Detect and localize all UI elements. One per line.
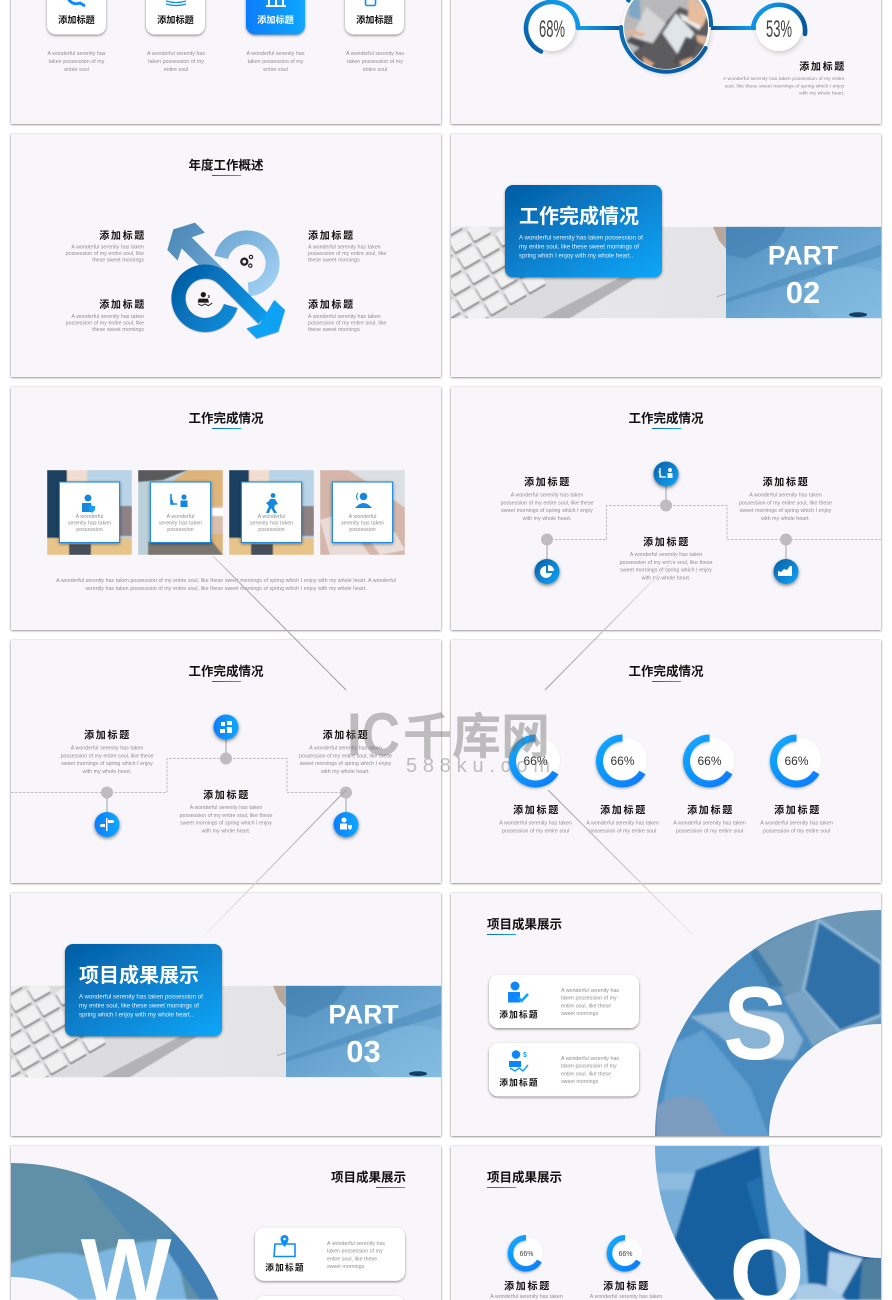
text: card descriptions: A wonderful serenity has [47,51,106,57]
card: section title: A wonderful serenity has taken possession of [79,993,203,1000]
text block: lower left [66,298,146,333]
card: section title: spring which I enjoy with my whole heart.. [519,253,633,260]
text block: right: A wonderful serenity has taken [749,492,822,498]
donut 4: 66% [784,754,809,768]
donut labels: possession of my entire soul [676,828,743,834]
result card 1: entire soul, like these [561,1004,611,1010]
donut labels: 添加标题 [603,1280,650,1292]
donut 4 [773,737,822,784]
text block: right note: 添加标题 [799,60,846,73]
donut labels: A wonderful serenity has taken [590,1294,662,1300]
banner photo: blue tinted [286,986,442,1078]
card: phone [345,0,404,34]
text block: right note [723,60,846,96]
content box: serenity has taken [68,520,111,526]
result card 2: sweet mornings [561,1079,599,1085]
panel: icon cards (top left, cropped) [11,0,441,124]
result card 1: taken possession of my [561,996,617,1002]
text block: lower left: these sweet mornings [92,327,144,333]
panel: results S [451,893,890,1140]
watermark: 588ku logo: 千库网 [403,710,550,764]
text block: lower left: A wonderful serenity has taken [71,314,144,320]
card: section title: 工作完成情况 [519,204,639,228]
panel: section divider part 03 [0,893,462,1136]
watermark: diagonal lines [205,555,693,935]
text block: left: 添加标题 [524,476,571,488]
card: search [47,0,106,34]
text block: middle: with my whole heart. [202,828,250,834]
text block: middle: sweet mornings of spring which I enjoy [620,568,712,574]
banner photo: blue tinted [726,226,882,318]
donut 1: 66% [523,754,548,768]
card: section title: my entire soul, like these sweet mornings of [79,1003,199,1010]
card: section title: spring which I enjoy with my whole heart.. [79,1012,193,1019]
text block: left: with my whole heart. [83,769,131,775]
heading: 工作完成情况 [628,664,704,678]
connector lines [577,26,757,30]
text block: left: A wonderful serenity has taken [71,746,143,752]
donut right [609,1237,642,1269]
text block: middle: with my whole heart. [642,576,690,582]
node: right [334,786,358,837]
card: section title: my entire soul, like these sweet mornings of [519,244,639,251]
text block: lower right [308,298,386,333]
panel: timeline bright [11,640,441,883]
panel: timeline blue dark [451,387,881,630]
donut labels: A wonderful serenity has taken [673,820,746,826]
panel: section divider part 02 [450,133,882,380]
text: card descriptions: taken possession of my [148,59,204,65]
result card 1: entire soul, like these [327,1256,377,1262]
text block: right: A wonderful serenity has taken [309,746,382,752]
text block: upper right: A wonderful serenity has taken [308,245,381,251]
text block: middle [180,788,272,834]
result card 2 [489,1043,639,1096]
gauge: 53% [753,5,805,51]
banner photo: keyboard [11,986,286,1078]
text block: left [501,476,593,522]
text block: upper right: possession of my entire soul, like [308,251,386,257]
text: part number: PART [768,240,838,270]
result card 1 [489,975,639,1028]
text: card descriptions: entire soul [363,67,387,73]
content box: possession [167,527,194,533]
donut left: 66% [519,1251,534,1258]
result card 1: A wonderful serenity has [561,988,619,994]
text block: left: 添加标题 [84,728,131,742]
text: caption [56,578,396,592]
result card 1: taken possession of my [327,1249,383,1255]
photo card 2 [138,470,223,555]
card: bank highlighted [246,0,305,34]
diagram: infinity arrows [167,223,285,338]
text block: right: with my whole heart. [321,769,370,775]
text block: right: 添加标题 [323,728,369,742]
text: card descriptions: entire soul [263,67,288,73]
text block: right: with my whole heart. [761,516,810,522]
heading: 年度工作概述 [188,158,264,172]
text block: lower right: these sweet mornings [308,327,360,333]
icon: person with trend: $ [208,294,211,299]
arrow: lower dark loop [178,272,285,338]
donut labels [499,804,833,834]
content box [332,482,393,542]
donut labels: A wonderful serenity has taken [760,820,833,826]
text: part number: 02 [786,275,820,310]
text: part number: 03 [346,1034,381,1069]
text block: left: with my whole heart. [523,516,571,522]
text block: lower right: possession of my entire soul, like [308,320,386,326]
content box: possession [76,527,103,533]
gauge: 53%: 53% [766,16,792,43]
timeline path [11,737,346,815]
text block: left: sweet mornings of spring which I enjoy [61,761,153,767]
text block: upper right [308,229,386,263]
text block: left: sweet mornings of spring which I enjoy [501,508,593,514]
icon: gears [241,255,253,267]
node: left [534,534,560,584]
donut labels: A wonderful serenity has taken [490,1294,563,1300]
text: card descriptions: A wonderful serenity has [147,51,205,57]
heading: 项目成果展示 [331,1170,406,1184]
text: caption: serenity has taken possession of my entire soul, like these sweet mornings of spring which I enjoy with my whole heart. [85,586,367,592]
panel: annual work overview [11,134,441,377]
text block: right note: soul, like these sweet mornings of spring which I enjoy [725,84,845,90]
text: part number: PART [328,1000,399,1030]
card: coins: 添加标题 [157,14,194,25]
timeline path [547,484,881,562]
gauge: 68% [526,2,578,51]
text block: middle: possession of my entire soul, like these [180,813,272,819]
content box: A wonderful [258,514,285,520]
result card 1: sweet mornings [327,1264,365,1270]
card: section title: 项目成果展示 [79,963,199,987]
card: section title [505,185,662,277]
gauge: 68%: 68% [539,16,565,43]
ring: upper light [221,237,273,289]
text block: lower right: 添加标题 [308,298,355,311]
card: section title: A wonderful serenity has taken possession of [519,234,643,241]
text block: lower left: 添加标题 [99,298,146,311]
text block: left: possession of my entire soul, like these [501,500,593,506]
letter S: S [723,966,788,1082]
panel: results W (bottom, cropped) [0,1140,441,1300]
text block: middle [620,536,712,582]
panel: percent comparison (top right, cropped) [451,0,881,124]
result card 1: 添加标题 [499,1008,539,1020]
node: top [214,714,238,764]
text block: lower left: possession of my entire soul, like [66,320,144,326]
text block: middle: sweet mornings of spring which I enjoy [180,821,272,827]
text block: middle: 添加标题 [203,788,250,802]
watermark: 588ku logo: IC [347,701,400,768]
watermark: 588ku logo [347,701,550,777]
content box: possession [258,527,285,533]
node: right [774,534,798,584]
text block: upper left: A wonderful serenity has taken [71,245,144,251]
panel: photo cards [11,387,441,630]
donut labels: 添加标题 [600,804,647,816]
donut 2: 66% [610,754,635,768]
text block: right: possession of my entire soul, like these [739,500,832,506]
card: section title [65,944,222,1036]
text block: right: sweet mornings of spring which I enjoy [300,761,392,767]
photo card 3 [229,470,314,555]
heading: 项目成果展示 [487,916,562,932]
text: card descriptions: taken possession of my [49,59,105,65]
panel: four donut gauges [451,640,881,883]
text block: upper right: 添加标题 [308,229,355,242]
donut labels: 添加标题 [513,804,560,816]
text block: upper left: these sweet mornings [92,257,144,263]
donut right: 66% [618,1251,633,1258]
donut labels: A wonderful serenity has taken [499,820,572,826]
result card 2: $ [523,1052,527,1059]
donut labels: possession of my entire soul [502,828,569,834]
content box: possession [349,527,376,533]
text block: left: possession of my entire soul, like these [61,754,153,760]
text block: middle: A wonderful serenity has taken [630,552,702,558]
text: card descriptions: entire soul [164,67,188,73]
text block: right note: with my whole heart. [799,90,844,96]
donut labels: 添加标题 [504,1280,551,1292]
text: card descriptions [47,51,404,73]
ring photo: desk [11,1163,219,1300]
content box: serenity has taken [159,520,202,526]
node: top [654,462,678,512]
banner photo: keyboard [451,226,726,318]
text block: right: 添加标题 [763,476,809,488]
donut 1 [512,737,560,784]
donut left [510,1237,544,1269]
text block: middle: A wonderful serenity has taken [190,805,262,811]
text block: lower right: A wonderful serenity has taken [308,314,381,320]
donut 2 [599,737,648,784]
result card 1: 添加标题 [265,1262,305,1272]
donut labels: possession of my entire soul [589,828,656,834]
text block: right [739,476,832,522]
card: coins [146,0,205,34]
donut labels: 添加标题 [687,804,734,816]
arrow: upper left [167,223,230,277]
photo card 4 [320,470,405,555]
node: left [94,786,120,837]
text: caption: A wonderful serenity has taken possession of my entire soul, like these sweet mornings of spring which I enjoy with my whole heart. A wonderful [56,578,396,584]
heading: 工作完成情况 [188,410,264,426]
content box [241,482,302,542]
result card 1 [255,1228,405,1281]
panel: results O (bottom, cropped) [451,1140,886,1300]
text block: right note: A wonderful serenity has taken possession of my entire [723,76,845,82]
content box: A wonderful [167,514,194,520]
ring photo: laptop [655,910,881,1136]
card: phone: 添加标题 [356,14,393,25]
text: card descriptions: A wonderful serenity has [346,51,404,57]
text block: right: possession of my entire soul, like these [299,754,392,760]
result card 1: A wonderful serenity has [327,1241,385,1247]
content box: serenity has taken [250,520,293,526]
content box: A wonderful [76,514,103,520]
content box [150,482,211,542]
text: card descriptions: entire soul [64,67,89,73]
donut labels: A wonderful serenity has taken [586,820,659,826]
card: search: 添加标题 [58,14,95,25]
text block: left: A wonderful serenity has taken [511,492,583,498]
result card 2: taken possession of my [561,1064,617,1070]
text block: middle: possession of my entire soul, like these [620,560,712,566]
result card 1: sweet mornings [561,1011,599,1017]
result card 2: entire soul, like these [561,1072,611,1078]
result card 2: A wonderful serenity has [561,1056,619,1062]
ring photo: man in suit [646,1140,886,1300]
text block: middle: 添加标题 [643,536,690,548]
text block: upper right: these sweet mornings [308,257,360,263]
content box: serenity has taken [341,520,384,526]
donut 3: 66% [697,754,722,768]
text: part number [328,1000,399,1069]
text: card descriptions: taken possession of my [347,59,403,65]
heading: 工作完成情况 [628,410,704,426]
donut 3 [686,737,734,784]
text block: upper left [66,229,146,263]
text: part number [768,240,838,310]
donut labels: 添加标题 [774,804,821,816]
text block: left [61,728,153,775]
text block: upper left: possession of my entire soul, like [66,251,144,257]
text: card descriptions: taken possession of my [248,59,304,65]
text block: right: sweet mornings of spring which I enjoy [740,508,832,514]
text: card descriptions: A wonderful serenity has [246,51,305,57]
donut labels [490,1280,662,1300]
heading: 项目成果展示 [487,1170,562,1184]
heading: 工作完成情况 [188,664,264,678]
photo card 1 [47,470,132,555]
text block: upper left: 添加标题 [99,229,146,242]
result card 2 [255,1296,405,1300]
card: bank highlighted: 添加标题 [257,14,294,25]
content box [59,482,120,542]
result card 2: 添加标题 [499,1076,539,1088]
center photo [619,0,716,73]
text block: right [299,728,392,775]
watermark: 588ku logo: 588ku.com [406,755,550,777]
content box: A wonderful [349,514,376,520]
donut labels: possession of my entire soul [763,828,830,834]
